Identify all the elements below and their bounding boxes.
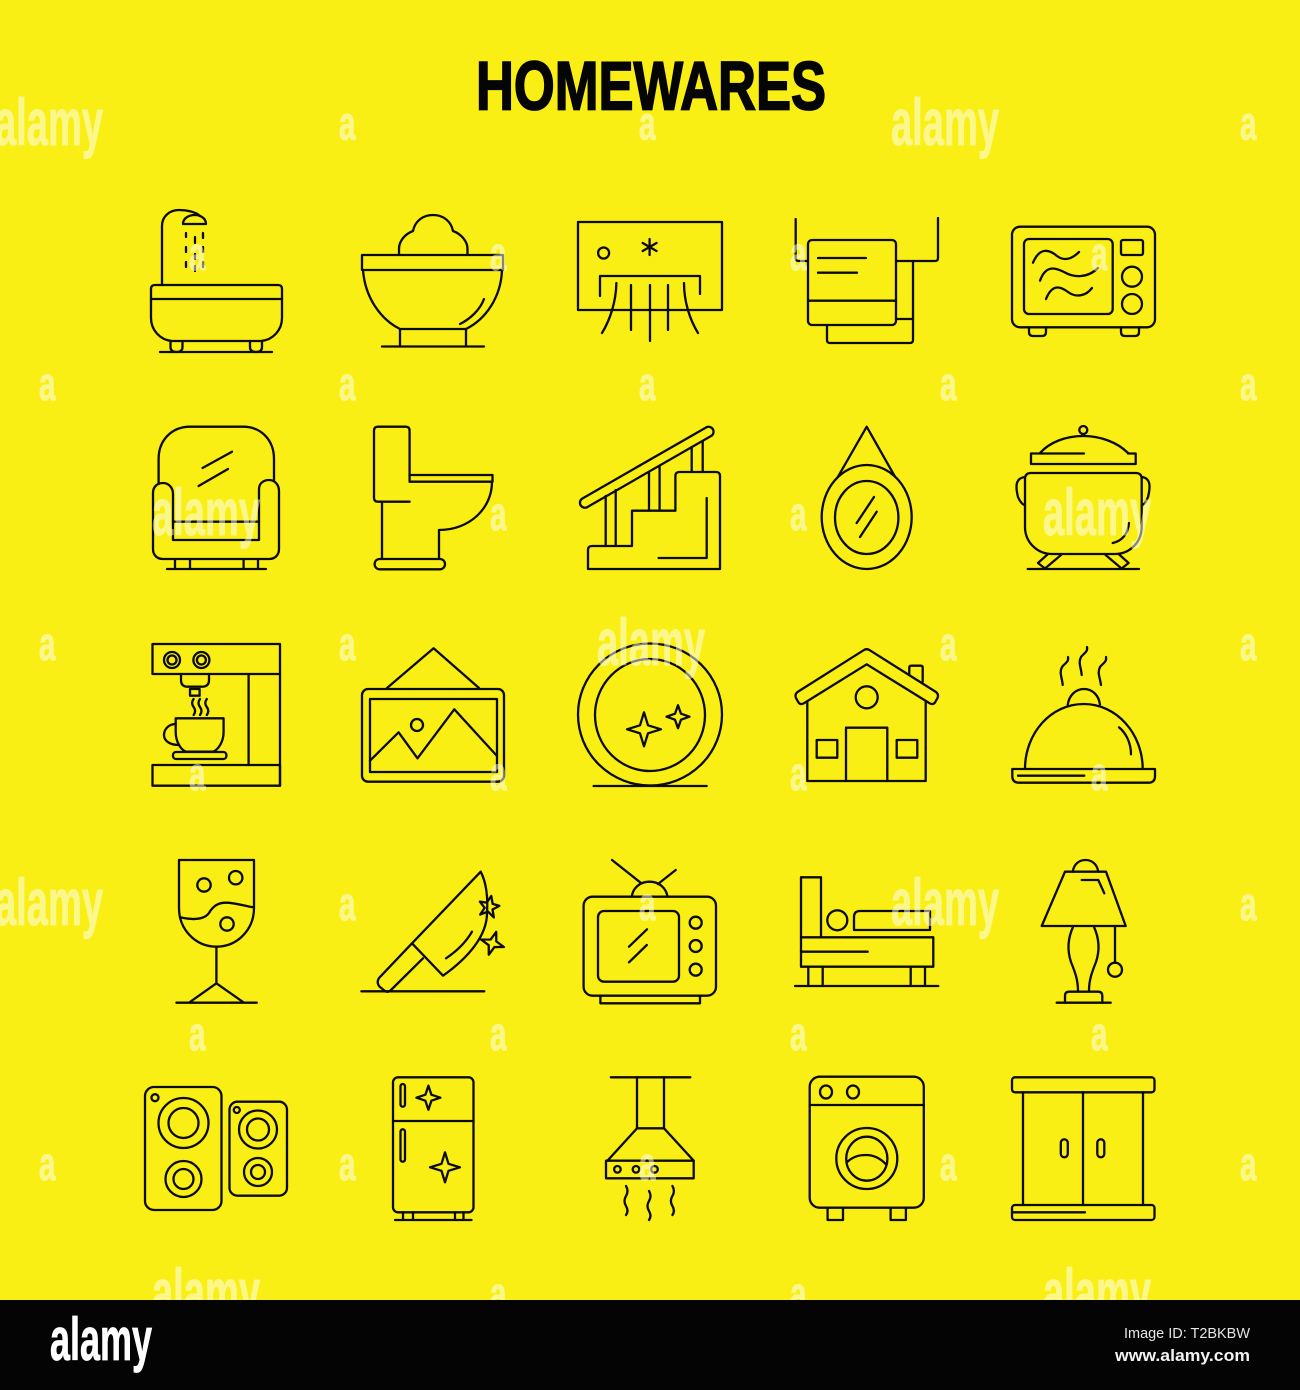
watermarks: a bbox=[639, 96, 656, 150]
icon: wine glass bbox=[176, 860, 257, 1003]
watermarks: a bbox=[940, 1137, 957, 1190]
watermarks: a bbox=[189, 747, 206, 800]
footer logo: alamy bbox=[50, 1306, 152, 1373]
website: www.alamy.com bbox=[1114, 1346, 1250, 1365]
watermarks: a bbox=[490, 227, 507, 280]
watermarks: alamy bbox=[1043, 475, 1151, 549]
footer bar bbox=[0, 1300, 1300, 1390]
icon: bowl bbox=[362, 215, 503, 346]
icon: framed picture bbox=[362, 648, 504, 782]
icon: kitchen knife bbox=[361, 872, 508, 992]
icon: table lamp bbox=[1042, 860, 1126, 1003]
watermarks: alamy bbox=[0, 85, 103, 159]
image id: Image ID: T2BKBW bbox=[1124, 1325, 1251, 1342]
icon: cooking pot bbox=[1016, 426, 1150, 569]
watermarks: a bbox=[790, 1007, 807, 1060]
watermarks: a bbox=[940, 617, 957, 670]
icon: food cloche bbox=[1012, 647, 1155, 783]
icon: toilet bbox=[374, 427, 492, 569]
icon: armchair bbox=[153, 427, 279, 569]
icon: wardrobe bbox=[1012, 1077, 1154, 1220]
watermarks: a bbox=[339, 357, 356, 410]
icon: house bbox=[796, 649, 938, 781]
icon: coffee machine bbox=[152, 644, 280, 786]
watermarks: a bbox=[490, 747, 507, 800]
watermarks: a bbox=[1240, 96, 1257, 150]
watermarks: a bbox=[189, 227, 206, 280]
watermarks: a bbox=[790, 747, 807, 800]
icon: bathtub with shower bbox=[151, 210, 282, 352]
icon: refrigerator bbox=[393, 1077, 474, 1220]
watermarks: a bbox=[39, 357, 56, 410]
icon grid bbox=[145, 210, 1155, 1220]
watermarks: alamy bbox=[891, 865, 999, 939]
watermarks: alamy bbox=[0, 865, 103, 939]
watermarks: alamy bbox=[152, 475, 260, 549]
icon: shiny plate bbox=[578, 644, 722, 786]
watermarks: a bbox=[639, 357, 656, 410]
icon: television bbox=[584, 860, 716, 1003]
icon: microwave bbox=[1012, 227, 1155, 336]
icon: towels on rail bbox=[796, 218, 938, 343]
watermarks: a bbox=[39, 1137, 56, 1190]
watermarks: a bbox=[1240, 1137, 1257, 1190]
watermarks: a bbox=[490, 1267, 507, 1320]
watermarks: a bbox=[490, 1007, 507, 1060]
icon: cooker hood bbox=[606, 1077, 694, 1220]
watermarks: a bbox=[339, 877, 356, 930]
title: HOMEWARES bbox=[476, 48, 826, 124]
watermarks: a bbox=[790, 487, 807, 540]
watermarks: a bbox=[1091, 747, 1108, 800]
watermarks: alamy bbox=[891, 85, 999, 159]
watermarks: a bbox=[490, 487, 507, 540]
watermarks: a bbox=[39, 617, 56, 670]
watermarks: a bbox=[790, 1267, 807, 1320]
icon: speakers bbox=[145, 1087, 287, 1210]
watermarks: a bbox=[639, 1137, 656, 1190]
watermarks: a bbox=[1091, 1007, 1108, 1060]
watermarks: alamy bbox=[1043, 1255, 1151, 1329]
icon: air conditioner bbox=[578, 222, 722, 341]
watermarks: a bbox=[790, 227, 807, 280]
icon: washing machine bbox=[810, 1077, 924, 1220]
watermarks: a bbox=[339, 1137, 356, 1190]
icon: bed bbox=[795, 877, 938, 986]
watermarks: a bbox=[1240, 877, 1257, 930]
watermarks: alamy bbox=[597, 605, 705, 679]
watermarks: a bbox=[339, 617, 356, 670]
watermarks: a bbox=[639, 877, 656, 930]
icon: hanging oval mirror bbox=[822, 427, 912, 569]
watermarks: a bbox=[189, 1007, 206, 1060]
watermarks: a bbox=[1091, 227, 1108, 280]
watermarks: a bbox=[1240, 617, 1257, 670]
icon: staircase with handrail bbox=[580, 427, 720, 569]
watermarks: a bbox=[339, 96, 356, 150]
watermarks: a bbox=[940, 357, 957, 410]
watermarks: alamy bbox=[152, 1255, 260, 1329]
watermarks: a bbox=[1240, 357, 1257, 410]
